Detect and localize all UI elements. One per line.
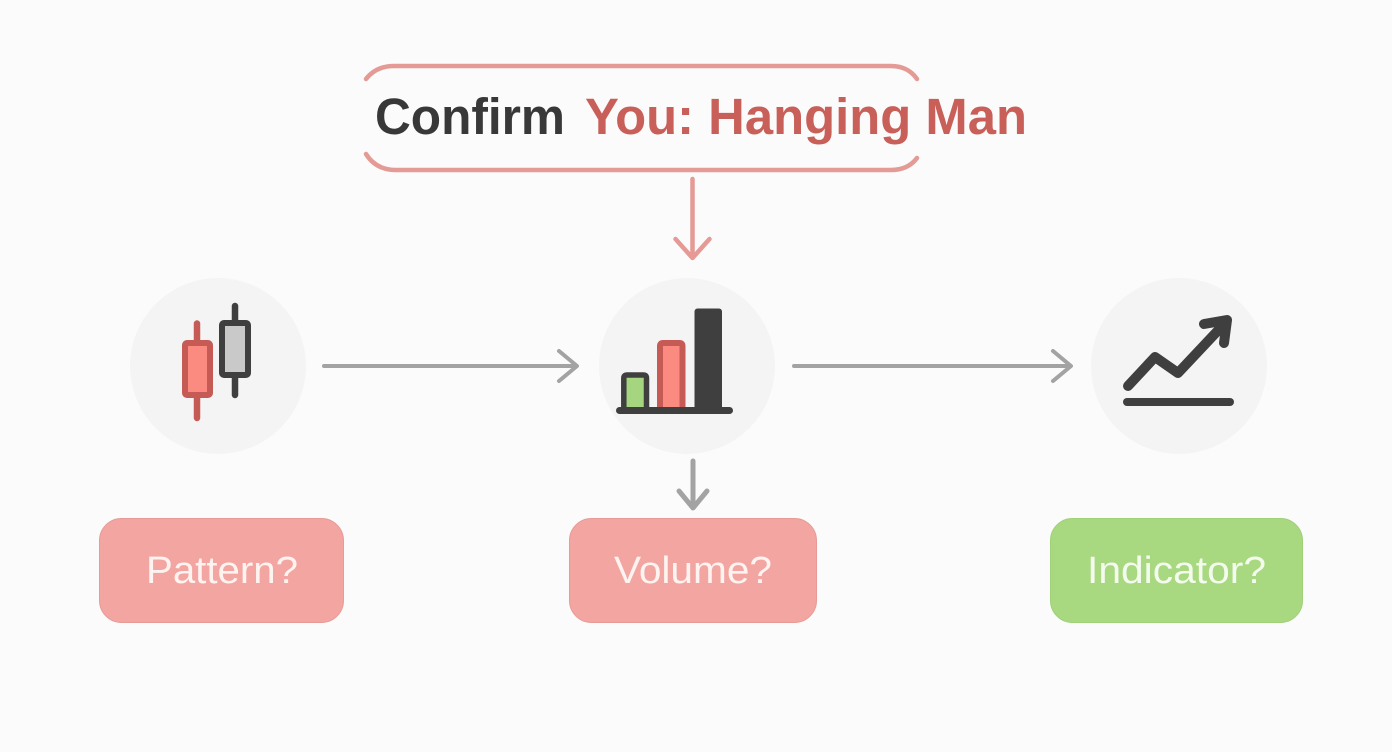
green volume bar [624, 375, 646, 410]
chart baseline [620, 407, 730, 414]
icon background circle [599, 278, 775, 454]
label: Pattern? [100, 518, 344, 622]
title with bracket frame [366, 66, 1027, 170]
icon: rising trend [1091, 278, 1267, 454]
icon background circle [1091, 278, 1267, 454]
title text: Confirm: Confirm [375, 88, 565, 145]
title text: You: Hanging Man: You: Hanging Man [585, 88, 1027, 145]
label: Pattern?: Pattern? [146, 550, 298, 592]
grey candlestick [222, 306, 248, 395]
trend arrow [1128, 320, 1227, 386]
label: Volume? [570, 518, 816, 622]
arrow: pattern to volume [324, 351, 577, 381]
label: Indicator?: Indicator? [1087, 550, 1266, 592]
label: Indicator? [1050, 518, 1302, 622]
arrow: volume to indicator [794, 351, 1071, 381]
icon: volume bars [599, 278, 775, 454]
trend baseline [1127, 398, 1230, 406]
bracket: top [366, 66, 917, 79]
red volume bar [660, 343, 682, 410]
icon: candlesticks [130, 278, 306, 454]
red candlestick [185, 324, 210, 418]
arrow: title down to volume [676, 179, 710, 258]
dark volume bar [694, 308, 722, 410]
arrow: volume down to label [679, 461, 707, 508]
label: Volume?: Volume? [614, 550, 772, 592]
icon background circle [130, 278, 306, 454]
bracket: bottom [366, 154, 917, 170]
